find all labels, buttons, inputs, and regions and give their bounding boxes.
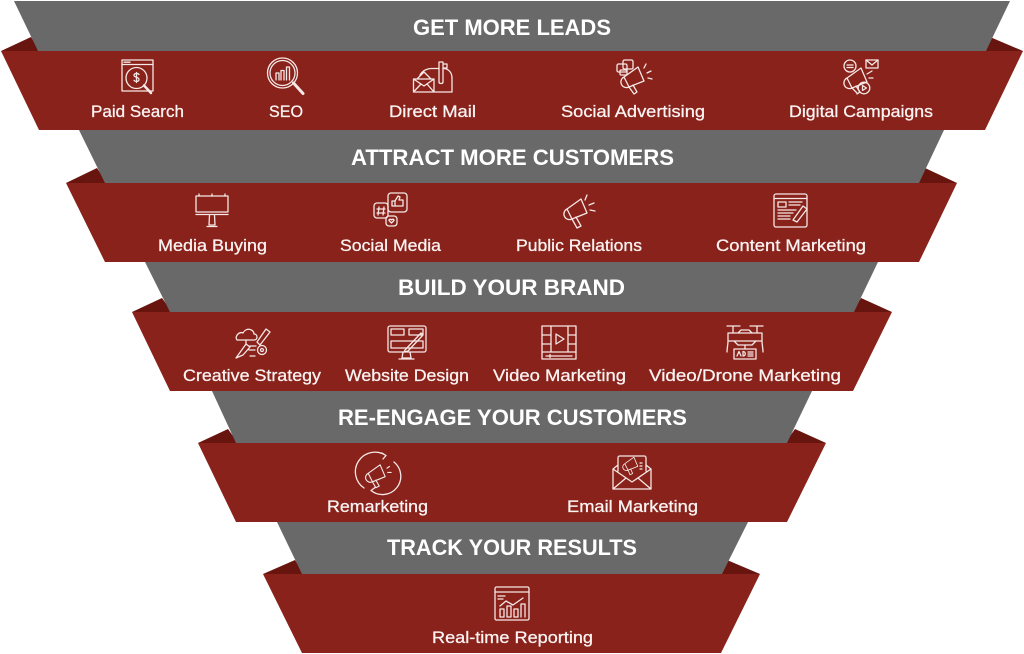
icon: megaphone with mail and play [844,60,878,94]
icon: billboard [196,194,228,226]
item: direct mail [389,62,476,121]
item: creative strategy: Creative Strategy [183,366,322,385]
item: remarketing [327,452,428,516]
item: public relations [516,195,642,255]
item: social advertising [561,60,705,121]
item: seo [268,58,303,121]
icon: cloud, pencil and gear [236,329,270,358]
item: public relations: Public Relations [516,236,642,255]
icon: envelope with megaphone [613,456,651,489]
item: email marketing [567,456,698,516]
icon: megaphone with social tiles [617,60,652,94]
icon: analytics dashboard [495,587,529,620]
heading: track your results: TRACK YOUR RESULTS [387,535,637,560]
heading: build your brand: BUILD YOUR BRAND [398,275,625,300]
funnel tier 3: build your brand [132,262,892,391]
icon: drone with ad banner [727,326,763,359]
item: social media [340,193,442,255]
item: paid search: Paid Search [91,102,184,121]
item: content marketing: Content Marketing [716,236,866,255]
item: video drone marketing [649,326,841,385]
icon: social bubbles [374,193,407,226]
icon: monitor design [388,326,426,359]
item: real-time reporting: Real-time Reporting [432,628,593,647]
icon: web page and pen [774,194,807,227]
item: digital campaigns: Digital Campaigns [789,102,933,121]
item: video marketing: Video Marketing [493,366,626,385]
item: seo: SEO [269,102,303,121]
funnel tier 4: re-engage your customers [198,391,826,522]
heading: re-engage your customers: RE-ENGAGE YOUR CUSTOMERS [338,405,687,430]
icon: megaphone [564,195,595,228]
item: real-time reporting [432,587,593,647]
icon: seo magnifier [268,58,303,94]
item: digital campaigns [789,60,933,121]
funnel tier 5: track your results [263,522,760,653]
funnel tier 2: attract more customers [66,130,957,262]
item: media buying [158,194,267,255]
item: media buying: Media Buying [158,236,267,255]
item: video marketing [493,326,626,385]
funnel tier 1: get more leads [1,1,1023,130]
icon: paid search [122,60,153,93]
item: social media: Social Media [340,236,442,255]
heading: attract more customers: ATTRACT MORE CUSTOMERS [351,145,674,170]
item: paid search [91,60,184,121]
item: social advertising: Social Advertising [561,102,705,121]
icon: mailbox [414,62,452,92]
icon: megaphone in refresh arrows [355,452,401,495]
icon: video player [542,326,576,359]
item: remarketing: Remarketing [327,497,428,516]
item: website design: Website Design [345,366,469,385]
item: video drone marketing: Video/Drone Marketing [649,366,841,385]
heading: get more leads: GET MORE LEADS [413,15,611,40]
item: website design [345,326,469,385]
item: creative strategy [183,329,322,385]
item: email marketing: Email Marketing [567,497,698,516]
item: direct mail: Direct Mail [389,102,476,121]
item: content marketing [716,194,866,255]
